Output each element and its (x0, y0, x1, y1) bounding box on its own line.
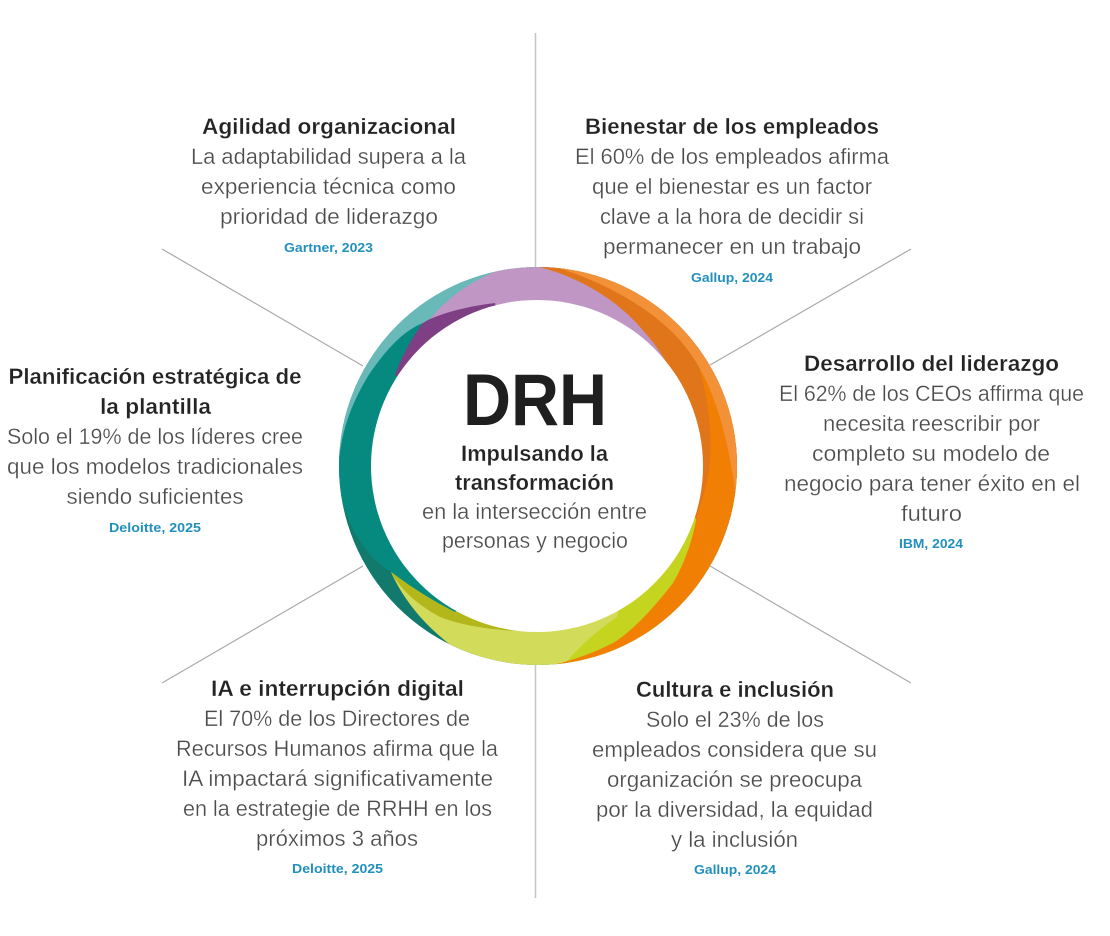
panel: IA e interrupción digital: IA impactará significativamente (182, 766, 493, 791)
panel: Planificación estratégica de la plantilla: la plantilla (100, 394, 211, 419)
panel: Planificación estratégica de la plantilla: Planificación estratégica de (8, 364, 302, 389)
panel: Agilidad organizacional: prioridad de liderazgo (220, 204, 438, 229)
panel: Planificación estratégica de la plantilla: Deloitte, 2025 (109, 520, 201, 535)
connector lines (162, 33, 911, 898)
panel: Desarrollo del liderazgo (779, 351, 1084, 551)
panel: Cultura e inclusión: empleados considera que su (592, 737, 877, 762)
panel: Cultura e inclusión: Cultura e inclusión (636, 677, 834, 702)
panel: Agilidad organizacional: Gartner, 2023 (284, 240, 373, 255)
panel: Bienestar de los empleados: Gallup, 2024 (691, 270, 774, 285)
panel: Planificación estratégica de la plantilla: siendo suficientes (66, 484, 244, 509)
panel: Bienestar de los empleados (575, 114, 889, 285)
panel: Cultura e inclusión: organización se preocupa (607, 767, 862, 792)
panel: Planificación estratégica de la plantilla: que los modelos tradicionales (7, 454, 303, 479)
panel: Cultura e inclusión: Gallup, 2024 (694, 862, 777, 877)
panel: IA e interrupción digital: Recursos Humanos afirma que la (176, 736, 498, 761)
panel: Desarrollo del liderazgo: negocio para tener éxito en el (784, 471, 1080, 496)
panel: IA e interrupción digital: próximos 3 años (256, 826, 418, 851)
panel: IA e interrupción digital: El 70% de los Directores de (204, 706, 470, 731)
panel: IA e interrupción digital: en la estrategie de RRHH en los (183, 796, 492, 821)
panel: Bienestar de los empleados: Bienestar de los empleados (585, 114, 879, 139)
panel: Planificación estratégica de la plantilla (7, 364, 303, 535)
subtitle: transformación (455, 470, 614, 495)
panel: Desarrollo del liderazgo: El 62% de los CEOs affirma que (779, 381, 1084, 406)
panel: Agilidad organizacional (191, 114, 466, 255)
subtitle (422, 441, 647, 553)
panel: Cultura e inclusión: Solo el 23% de los (646, 707, 824, 732)
title: DRH: DRH (463, 360, 607, 441)
panel: Agilidad organizacional: experiencia técnica como (201, 174, 456, 199)
panel: Desarrollo del liderazgo: completo su modelo de (812, 441, 1050, 466)
panel: Bienestar de los empleados: El 60% de los empleados afirma (575, 144, 889, 169)
subtitle: personas y negocio (442, 528, 628, 553)
panel: Cultura e inclusión: por la diversidad, la equidad (596, 797, 873, 822)
panel: IA e interrupción digital: Deloitte, 2025 (292, 861, 383, 876)
panel: Desarrollo del liderazgo: necesita reescribir por (823, 411, 1040, 436)
panel: Planificación estratégica de la plantilla: Solo el 19% de los líderes cree (7, 424, 303, 449)
panel: Desarrollo del liderazgo: futuro (901, 501, 962, 526)
panel: Cultura e inclusión: y la inclusión (671, 827, 798, 852)
central white disc with text (371, 300, 703, 632)
subtitle: en la intersección entre (422, 499, 647, 524)
panel: Desarrollo del liderazgo: IBM, 2024 (899, 536, 964, 551)
panel: IA e interrupción digital: IA e interrupción digital (211, 676, 464, 701)
panel: Agilidad organizacional: Agilidad organizacional (202, 114, 456, 139)
panel: Cultura e inclusión (592, 677, 877, 877)
panel: IA e interrupción digital (176, 676, 498, 876)
panel: Desarrollo del liderazgo: Desarrollo del liderazgo (804, 351, 1059, 376)
panel: Bienestar de los empleados: clave a la hora de decidir si (600, 204, 864, 229)
subtitle: Impulsando la (461, 441, 608, 466)
panel: Bienestar de los empleados: que el bienestar es un factor (592, 174, 872, 199)
central multicolour ring (339, 267, 737, 665)
panel: Bienestar de los empleados: permanecer en un trabajo (603, 234, 861, 259)
panel: Agilidad organizacional: La adaptabilidad supera a la (191, 144, 466, 169)
